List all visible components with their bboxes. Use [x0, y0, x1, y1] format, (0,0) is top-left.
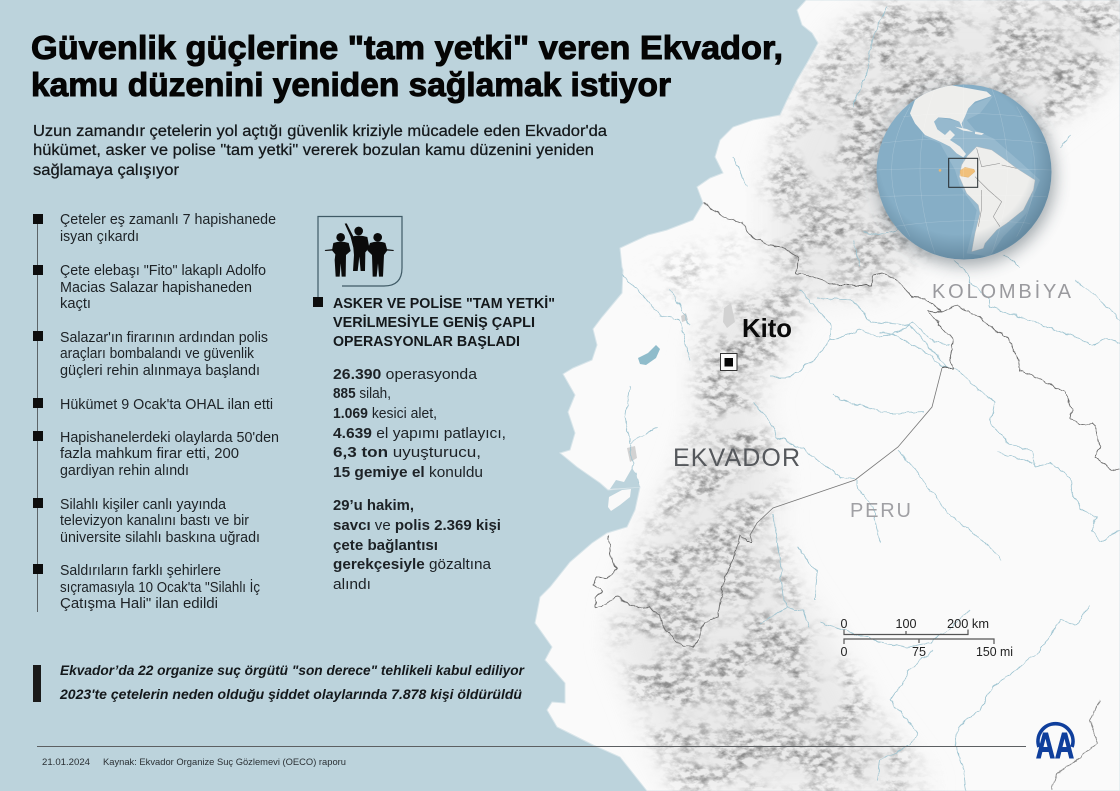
title [31, 30, 783, 104]
item 3: güçleri rehin alınmaya başlandı [60, 363, 260, 379]
operations figures: 6,3 ton uyuşturucu, [333, 445, 481, 461]
operations heading: ASKER VE POLİSE "TAM YETKİ" [333, 295, 555, 312]
footer [37, 746, 1026, 768]
shelf [923, 96, 1040, 257]
item 3: Salazar'ın firarının ardından polis [60, 330, 268, 346]
mountain shading [615, 0, 1120, 791]
item 5: gardiyan rehin alındı [60, 463, 189, 479]
item 2: Macias Salazar hapishaneden [60, 280, 252, 296]
intro text: Uzun zamandır çetelerin yol açtığı güvenlik kriziyle mücadele eden Ekvador'da [33, 123, 607, 140]
operations figures: 4.639 el yapımı patlayıcı, [333, 426, 506, 442]
item 1: isyan çıkardı [60, 229, 139, 245]
footer: 21.01.2024 [42, 757, 90, 768]
borders [593, 202, 1120, 790]
land mass [535, 0, 1120, 791]
item 7 [33, 563, 260, 612]
title: kamu düzenini yeniden sağlamak istiyor [31, 67, 671, 104]
footer: Kaynak: Ekvador Organize Suç Gözlemevi (OECO) raporu [103, 757, 346, 768]
map label: Ekvador: EKVADOR [673, 444, 800, 472]
Puna island [608, 489, 631, 511]
item 3: araçları bombalandı ve güvenlik [60, 346, 255, 362]
logo: AA: AA [1036, 725, 1074, 766]
mountain texture [615, 0, 1120, 791]
item 4: Hükümet 9 Ocak'ta OHAL ilan etti [60, 397, 273, 413]
operations figures: 15 gemiye el konuldu [333, 465, 483, 481]
detentions text: çete bağlantısı [333, 538, 438, 554]
South America [959, 147, 1035, 252]
country borders on globe [975, 148, 1017, 227]
detentions text: 29’u hakim, [333, 498, 414, 514]
scale bar: 200 km [947, 617, 989, 631]
operations figures [333, 367, 506, 481]
cities [627, 303, 735, 462]
callout: organized crime: Ekvador’da 22 organize suç örgütü "son derece" tehlikeli kabul ediliyor [60, 662, 526, 678]
operations heading: VERİLMESİYLE GENİŞ ÇAPLI [333, 314, 535, 331]
detentions text [333, 498, 501, 593]
item 6: Silahlı kişiler canlı yayında [60, 497, 227, 513]
item 5: Hapishanelerdeki olaylarda 50'den [60, 430, 279, 446]
callout: organized crime: 2023'te çetelerin neden olduğu şiddet olaylarında 7.878 kişi öldürüldü [59, 686, 522, 702]
item 7: Saldırıların farklı şehirlere [60, 563, 221, 579]
item 2: kaçtı [60, 296, 91, 312]
operations heading: OPERASYONLAR BAŞLADI [333, 334, 520, 350]
locator square [949, 158, 978, 187]
scale bar: 0 [841, 617, 848, 631]
Caribbean islands [955, 127, 984, 135]
detentions text: savcı ve polis 2.369 kişi [333, 518, 501, 534]
scale bar: 100 [896, 617, 917, 631]
intro text: hükümet, asker ve polise "tam yetki" vererek bozulan kamu düzenini yeniden [33, 142, 594, 159]
item 3 [33, 330, 268, 379]
intro text: sağlamaya çalışıyor [33, 162, 179, 179]
map label: Kolombiya: KOLOMBİYA [932, 280, 1072, 303]
scale bar: 150 mi [976, 645, 1013, 659]
map: terrain of Ecuador and neighbours [535, 0, 1120, 791]
rivers [623, 7, 1120, 791]
scale bar: 0 [841, 645, 848, 659]
graticule [877, 85, 1052, 258]
detentions text: alındı [333, 577, 371, 593]
map label: Peru: PERU [850, 500, 911, 522]
item 1: Çeteler eş zamanlı 7 hapishanede [60, 212, 276, 228]
item 2: Çete elebaşı "Fito" lakaplı Adolfo [60, 263, 266, 279]
callout: organized crime [33, 662, 526, 702]
item 5: fazla mahkum firar etti, 200 [60, 446, 239, 462]
North America [910, 85, 992, 157]
icon: soldiers [325, 223, 394, 277]
reservoir [638, 345, 660, 365]
map label: Kito: Kito [742, 313, 792, 343]
item 6: üniversite silahlı baskına uğradı [60, 530, 260, 546]
operations heading [333, 295, 555, 350]
detentions text: gerekçesiyle gözaltına [333, 557, 492, 573]
intro text [33, 123, 607, 179]
locator globe [876, 84, 1055, 266]
item 2 [33, 263, 266, 312]
item 1 [33, 212, 276, 245]
globe shading [876, 84, 1052, 260]
panel: timeline list [33, 212, 279, 612]
item 7: sıçramasıyla 10 Ocak'ta "Silahlı İç [60, 578, 260, 596]
Galapagos [939, 169, 941, 172]
Ecuador [960, 167, 975, 177]
item 6 [33, 497, 260, 546]
operations figures: 885 silah, [333, 386, 391, 402]
scale bar: 75 [912, 645, 926, 659]
title: Güvenlik güçlerine "tam yetki" veren Ekvador, [31, 30, 783, 67]
item 6: televizyon kanalını bastı ve bir [60, 513, 249, 529]
panel: operations [313, 216, 555, 593]
item 7: Çatışma Hali" ilan edildi [60, 596, 218, 612]
scale bar [841, 617, 1013, 659]
item 5 [33, 430, 279, 479]
icon frame [318, 216, 402, 300]
operations figures: 1.069 kesici alet, [333, 406, 437, 422]
operations figures: 26.390 operasyonda [333, 367, 478, 383]
Ecuador-Peru straight border [750, 368, 942, 542]
panel bullet [313, 297, 323, 307]
gulf delta water [610, 468, 640, 489]
icon: capital marker [720, 354, 737, 370]
